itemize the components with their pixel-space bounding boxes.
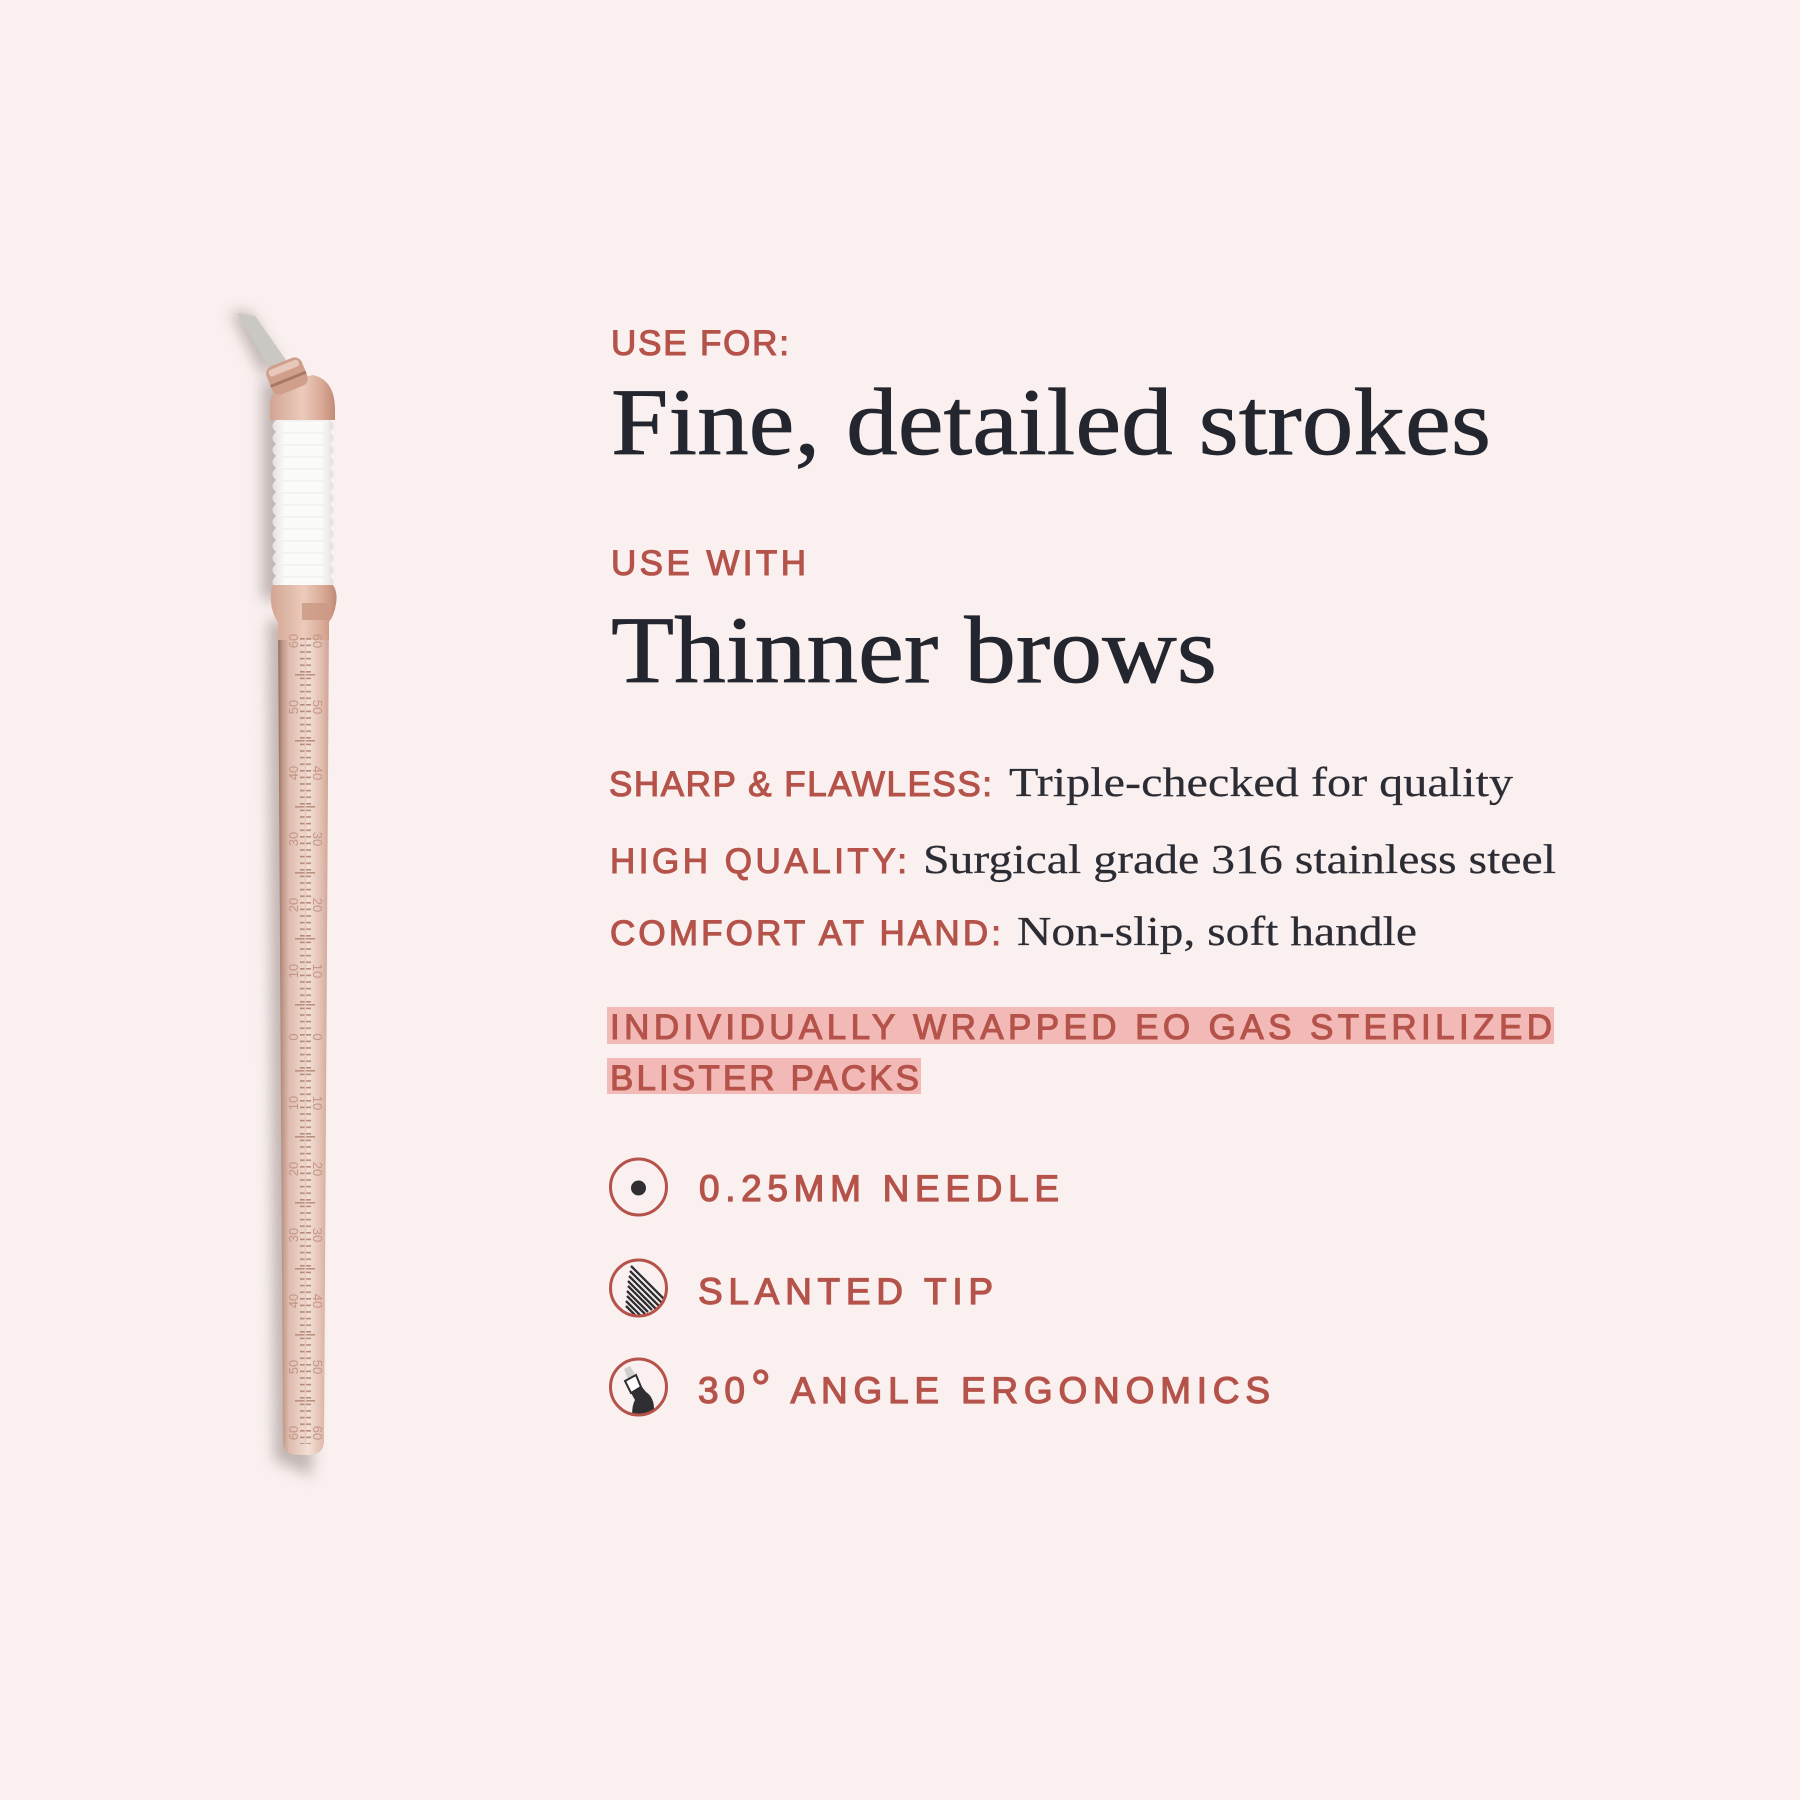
spec: slanted tip: SLANTED TIP	[698, 1271, 993, 1312]
feature: sharp and flawless: Triple-checked for quality	[1009, 759, 1514, 805]
feature: sharp and flawless	[609, 759, 1514, 805]
ruler numbers: 50	[310, 700, 325, 714]
ruler numbers: 30	[310, 1228, 325, 1242]
spec: angle ergonomics: 30	[698, 1370, 745, 1411]
ruler numbers: 50	[286, 1360, 301, 1374]
metal cap	[270, 375, 335, 420]
spec: angle ergonomics: °	[751, 1360, 771, 1416]
heading: thinner brows: Thinner brows	[611, 597, 1217, 703]
label: use with: USE WITH	[611, 544, 806, 583]
ruler numbers: 60	[310, 634, 325, 648]
ruler numbers: 10	[286, 1096, 301, 1110]
ruler numbers: 30	[286, 832, 301, 846]
spec: slanted tip	[610, 1260, 993, 1318]
ruler numbers: 0	[286, 1033, 301, 1041]
icon: angled pen	[610, 1359, 666, 1416]
spec: angle ergonomics: ANGLE ERGONOMICS	[776, 1370, 1270, 1411]
ruler numbers: 40	[286, 766, 301, 780]
ruler numbers: 0	[310, 1033, 325, 1041]
spec: needle	[610, 1159, 1059, 1215]
ruler numbers: 20	[310, 898, 325, 912]
icon: needle dot	[610, 1159, 666, 1215]
ruler numbers: 50	[310, 1360, 325, 1374]
ruler numbers: 20	[286, 898, 301, 912]
ruler numbers: 60	[310, 1426, 325, 1440]
label: use for: USE FOR:	[611, 324, 789, 363]
feature: comfort at hand	[610, 908, 1417, 954]
ruler numbers: 40	[310, 1294, 325, 1308]
collar	[264, 355, 310, 397]
heading: fine, detailed strokes: Fine, detailed strokes	[611, 369, 1491, 475]
ruler numbers: 60	[286, 634, 301, 648]
highlighted note: INDIVIDUALLY WRAPPED EO GAS STERILIZED	[610, 1008, 1552, 1047]
ruler numbers: 10	[286, 964, 301, 978]
ruler numbers: 10	[310, 964, 325, 978]
icon: slanted tip	[610, 1260, 666, 1318]
spec: angle ergonomics	[610, 1359, 1270, 1416]
feature: sharp and flawless: SHARP & FLAWLESS:	[609, 765, 992, 804]
blade	[237, 313, 286, 369]
ruler numbers: 30	[310, 832, 325, 846]
ruler ticks	[295, 632, 315, 1444]
lower metal collar	[271, 585, 337, 640]
feature: high quality	[610, 836, 1556, 882]
ruler numbers: 20	[310, 1162, 325, 1176]
ruler numbers: 50	[286, 700, 301, 714]
microblading pen	[230, 312, 337, 1476]
spec: needle: 0.25MM NEEDLE	[699, 1168, 1059, 1209]
ruler numbers: 60	[286, 1426, 301, 1440]
handle shaft	[278, 610, 329, 1455]
ruler numbers: 40	[310, 766, 325, 780]
highlighted note: BLISTER PACKS	[610, 1059, 919, 1098]
soft white grip	[272, 420, 334, 588]
ruler numbers: 10	[310, 1096, 325, 1110]
feature: high quality: HIGH QUALITY:	[610, 842, 907, 881]
feature: comfort at hand: COMFORT AT HAND:	[610, 914, 1001, 953]
pen shadow	[230, 312, 312, 1476]
ruler numbers	[286, 634, 325, 1440]
highlighted note	[607, 1007, 1554, 1098]
ruler numbers: 40	[286, 1294, 301, 1308]
ruler numbers: 20	[286, 1162, 301, 1176]
feature: high quality: Surgical grade 316 stainless steel	[923, 836, 1556, 882]
feature: comfort at hand: Non-slip, soft handle	[1017, 908, 1417, 954]
ruler numbers: 30	[286, 1228, 301, 1242]
